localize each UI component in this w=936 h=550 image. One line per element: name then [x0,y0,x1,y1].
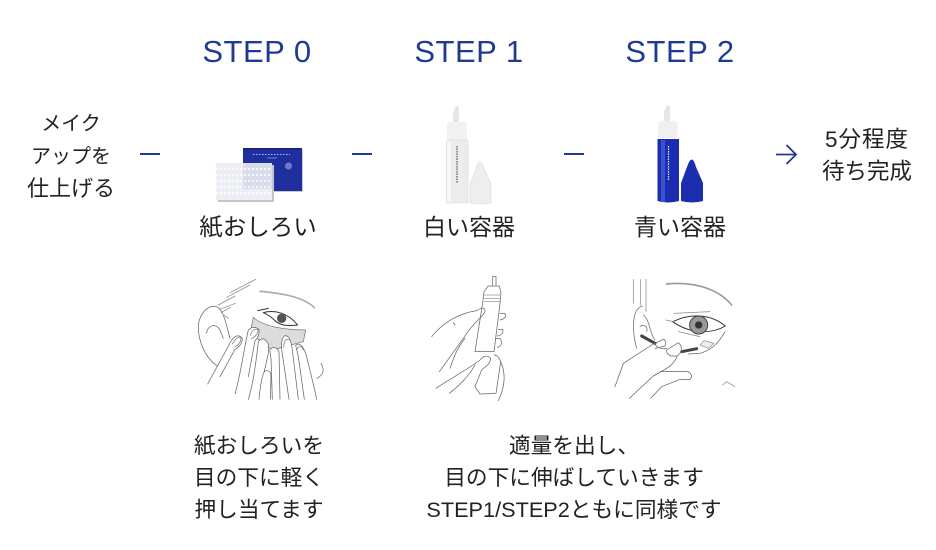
label: white container: 白い容器 [423,214,515,240]
heading: STEP 2: STEP 2 [625,34,735,69]
text: finish makeup [27,113,115,201]
icon: white bottle and cap [446,106,492,204]
illustration: applying under the eye [614,279,736,399]
dash connector 1 [140,153,160,155]
label: blue container: 青い容器 [634,214,726,240]
text: finish makeup: 仕上げる [27,176,115,201]
caption: step 0 instructions: 紙おしろいを [194,433,324,458]
text: wait five minutes: 5分程度 [825,127,909,152]
caption: step 1 and 2 instructions: 目の下に伸ばしていきます [444,465,704,490]
text: wait five minutes [822,127,912,184]
text: wait five minutes: 待ち完成 [822,159,912,184]
dash connector 2 [352,153,372,155]
caption: step 1 and 2 instructions: 適量を出し、 [509,433,639,458]
dash connector 3 [564,153,584,155]
caption: step 0 instructions [194,433,324,522]
caption: step 0 instructions: 目の下に軽く [194,465,324,490]
illustration: pressing paper under the eye [198,279,324,400]
icon: blotting paper product [216,148,303,202]
text: finish makeup: メイク [41,113,101,135]
heading: STEP 1: STEP 1 [414,34,524,69]
label: blotting paper: 紙おしろい [199,214,317,240]
icon: blue bottle and cap [658,105,703,202]
arrow [776,144,798,165]
caption: step 1 and 2 instructions: STEP1/STEP2ともに同様です [426,497,722,522]
illustration: hands holding the bottle [431,276,506,401]
caption: step 1 and 2 instructions [426,433,722,522]
caption: step 0 instructions: 押し当てます [194,497,324,522]
heading: STEP 0: STEP 0 [202,34,312,69]
text: finish makeup: アップを [31,146,111,168]
